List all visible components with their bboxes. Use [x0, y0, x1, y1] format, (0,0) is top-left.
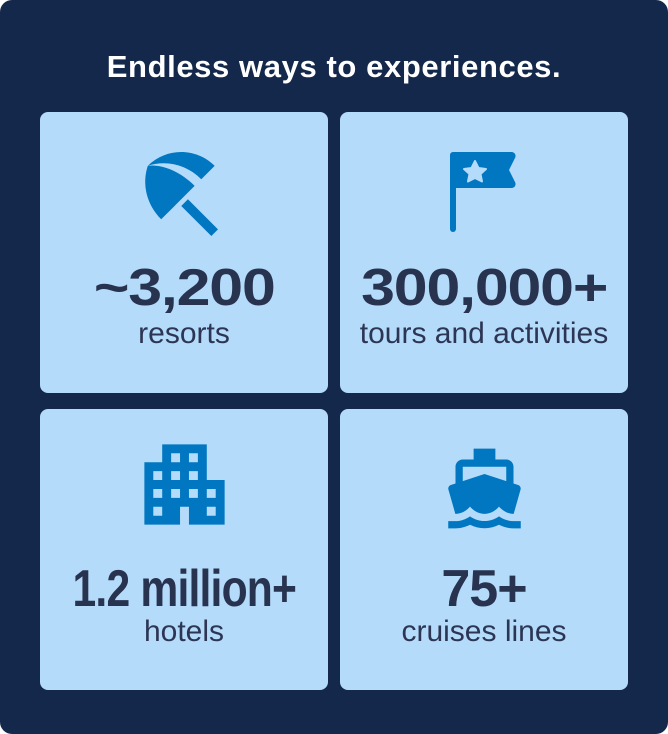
icon: building	[144, 444, 225, 525]
stat label: tours and activities	[360, 317, 608, 350]
stat label: cruises lines	[401, 615, 567, 648]
panel: resorts	[40, 112, 328, 393]
stat number: 300,000+	[361, 259, 607, 317]
stat label: resorts	[138, 317, 230, 350]
stat number: 1.2 million+	[72, 560, 296, 618]
icon: flag with star	[450, 152, 516, 232]
icon: umbrella	[145, 152, 218, 236]
stat label: hotels	[144, 615, 224, 648]
stat number: 75+	[441, 560, 527, 618]
panel: hotels	[40, 409, 328, 690]
panel: tours	[340, 112, 628, 393]
title: Endless ways to experiences.	[107, 49, 561, 84]
panel: cruises	[340, 409, 628, 690]
icon: ship	[448, 448, 521, 528]
stat number: ~3,200	[94, 259, 274, 317]
